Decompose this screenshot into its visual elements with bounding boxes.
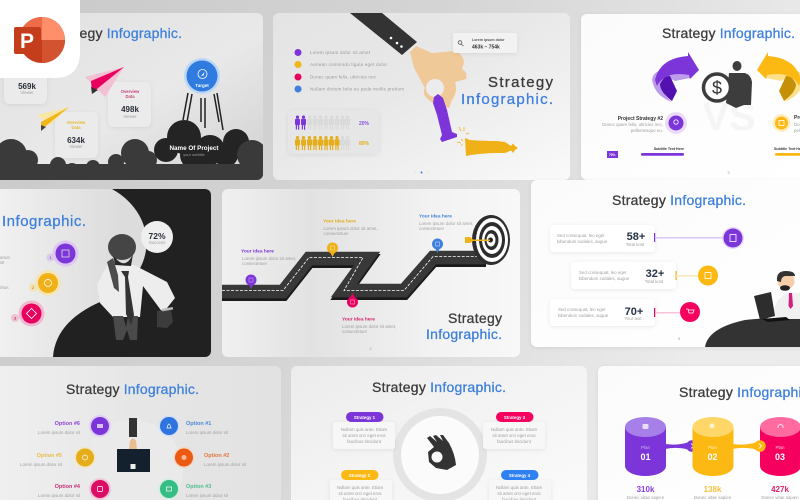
connectors: [665, 441, 760, 451]
callout: price range: 463k – 754k: [472, 44, 500, 50]
impact sparks: [457, 127, 469, 146]
callout: 72 percent: Success: [149, 240, 166, 245]
title: slide 6: Strategy Infographic.: [612, 192, 746, 208]
pin: blue: [432, 238, 443, 253]
cylinder: plan 02: Plan: [708, 445, 717, 450]
list: coloured bullets: Aenean commodo ligula eget dolor: [310, 62, 388, 67]
row: 70+: bibendum sodales, augue: [558, 313, 609, 318]
strategy 3: faucibus tincidunt: [497, 439, 532, 444]
row: 58+: 58+: [627, 231, 645, 243]
strategy 2: [330, 470, 392, 500]
strategy 2: sit amet orci eget eros: [338, 491, 382, 496]
progress: purple: [607, 147, 684, 158]
strategy 1: sit amet orci eget eros: [342, 433, 386, 438]
panel: total cost slide: [531, 180, 800, 347]
list: coloured bullets: Lorem ipsum dolor sit amet: [310, 50, 371, 55]
card: people pictogram: 80%: [359, 141, 370, 147]
row: 70+: 70+: [625, 306, 643, 318]
list: coloured bullets: Donec quam felis, ultricies nec: [310, 74, 377, 80]
text: project strategy 2: Donec quam felis, ultricies nec,: [602, 122, 663, 127]
chess piece: fallen yellow king: [465, 138, 518, 156]
option 6: [38, 415, 111, 437]
option 4: [38, 478, 111, 500]
title: slide 2: Infographic.: [461, 91, 553, 108]
card: 634k overview: Overview: [67, 120, 86, 125]
progress: purple: Subtitle Text Here: [654, 147, 684, 151]
title: slide 1: Strategy Infographic.: [49, 25, 182, 41]
card: 498k overview: [108, 82, 151, 127]
icon: yellow arrow: [757, 52, 800, 102]
row: 70+: [550, 299, 700, 326]
list: coloured bullets: Nullam dictum felis eu pede mollis pretium: [310, 86, 404, 92]
dark curved background: [53, 189, 211, 357]
strategy 3: Strategy 3: [504, 415, 526, 420]
badge: PowerPoint logo: [0, 0, 80, 78]
icon: purple arrow: [652, 52, 699, 102]
text: project strategy 2: pellentesque eu.: [631, 128, 663, 133]
option 4: Option #4: [55, 484, 81, 490]
cylinder: plan 03: [760, 417, 800, 476]
text: name of project: Name Of Project: [170, 145, 219, 152]
option 1: Lorem ipsum dolor sit: [186, 430, 229, 435]
illustration: man at desk: [705, 271, 800, 347]
label: idea pink: [342, 316, 396, 334]
option 5: Option #5: [37, 453, 62, 459]
faint ring: [83, 420, 183, 500]
option 2: Option #2: [204, 453, 229, 459]
card: 634k overview: [55, 112, 98, 158]
progress: yellow: [774, 147, 800, 156]
illustration: businessman on phone: [97, 234, 175, 340]
pin: purple: [246, 274, 256, 289]
callout: price range: [453, 33, 517, 53]
chess piece: purple bishop: [433, 94, 457, 142]
option 3: [158, 478, 229, 500]
value: 138k: Donec vitae sapien: [694, 495, 732, 500]
label: idea blue: [419, 214, 473, 231]
option 5: [20, 447, 96, 468]
value: 310k: Donec vitae sapien: [627, 495, 665, 500]
cylinder: plan 03: 03: [775, 452, 785, 462]
callout: 72 percent: [141, 221, 173, 253]
panel: six options slide: [0, 366, 281, 500]
step 1: 1: [49, 255, 52, 260]
strategy 1: [333, 412, 395, 449]
pin: pink: [347, 293, 358, 308]
icon: yellow circle: [772, 114, 790, 132]
clock ring: [393, 408, 487, 500]
cylinder: plan 01: Plan: [641, 445, 650, 450]
label: idea yellow: Your idea here: [323, 218, 356, 224]
value: 427k: 427k: [771, 485, 789, 494]
step 3: 3: [14, 316, 17, 320]
label: idea pink: consectetuer: [342, 329, 368, 334]
icon: purple circle: [665, 112, 687, 134]
card: 498k overview: Viewer: [123, 114, 137, 119]
title: slide 4: Infographic.: [2, 213, 86, 230]
strategy 4: Strategy 4: [509, 473, 531, 478]
title: slide 5: Strategy: [448, 310, 502, 326]
card: 569k viewer: 569k: [18, 82, 36, 91]
option 6: Option #6: [55, 421, 80, 427]
target circle: [184, 58, 220, 94]
card: 569k viewer: Viewer: [20, 90, 34, 95]
pin: yellow: [327, 242, 338, 257]
card: 498k overview: Data: [125, 94, 135, 99]
target and dart: [465, 215, 510, 265]
row: 32+: Sed consequat, leo eget: [579, 270, 627, 275]
value: 138k: [694, 485, 732, 500]
value: 427k: [761, 485, 799, 500]
label: idea yellow: [323, 218, 378, 236]
title: slide 5: Infographic.: [426, 326, 502, 342]
pagination: slide 6: 9: [678, 336, 681, 341]
pagination dots: [414, 172, 429, 174]
cylinder: plan 02: [692, 417, 734, 476]
text: name of project: your subtitle: [183, 152, 206, 157]
card: 634k overview: Data: [71, 125, 81, 130]
value: 427k: Donec vitae sapien: [761, 495, 799, 500]
small step text: rhus: [0, 285, 9, 290]
label: idea blue: Your idea here: [419, 214, 452, 220]
cylinder: plan 02: 02: [707, 452, 718, 462]
icon: businessman with dollar: [704, 61, 752, 108]
target circle: Target: [195, 83, 209, 88]
icon: pink paper plane: [85, 67, 124, 97]
title: slide 2: [461, 74, 554, 108]
row: 70+: Sed consequat, leo eget: [558, 307, 606, 312]
label: idea blue: Lorem ipsum dolor sit amet,: [419, 221, 473, 226]
row: 32+: [571, 262, 718, 289]
icon: ok hand: [427, 435, 456, 470]
step 2: 2: [32, 285, 35, 290]
row: 58+: [550, 225, 744, 252]
strategy 4: [489, 470, 551, 500]
card: people pictogram: 20%: [359, 121, 370, 127]
strategy 4: sit amet orci eget eros: [497, 491, 541, 496]
label: idea pink: Lorem ipsum dolor sit amet,: [342, 324, 396, 329]
callout: price range: Lorem ipsum dolor: [472, 38, 505, 42]
icon: businessman with dollar: $: [712, 78, 722, 98]
illustration: hand and briefcase: [117, 418, 150, 472]
strategy 3: sit amet orci eget eros: [492, 433, 536, 438]
panel: versus slide: [581, 14, 800, 180]
road: [222, 256, 486, 294]
strategy 1: faucibus tincidunt: [347, 439, 382, 444]
cylinder: plan 01: [625, 417, 666, 476]
small step text: amet: [0, 255, 11, 260]
strategy 2: Strategy 2: [349, 473, 371, 478]
option 3: Lorem ipsum dolor sit: [186, 493, 229, 498]
card: 569k viewer: [4, 68, 47, 104]
card: 634k overview: Viewer: [69, 144, 83, 149]
title: slide 3: Strategy Infographic.: [662, 25, 795, 41]
label: idea purple: [241, 248, 296, 266]
text: name of project: [170, 145, 219, 157]
label: idea yellow: Lorem ipsum dolor sit amet,: [324, 226, 378, 231]
pagination: slide 3: 3: [727, 170, 730, 175]
panel: four strategies slide: [291, 366, 587, 500]
value: 310k: 310k: [637, 485, 655, 494]
row: 58+: bibendum sodales, augue: [557, 239, 608, 244]
text: project strategy right: [794, 115, 800, 133]
callout: 72 percent: 72%: [148, 231, 166, 241]
smoke trails: [183, 93, 223, 130]
row: 32+: bibendum sodales, augue: [579, 276, 630, 281]
connector node purple: [686, 440, 698, 452]
label: idea purple: consectetuer: [242, 261, 268, 266]
row: 32+: Total kost: [645, 279, 664, 284]
text: project strategy 2: [602, 116, 663, 133]
progress: purple: 70%: [609, 153, 616, 157]
strategy 3: [483, 412, 545, 449]
row: 58+: Sed consequat, leo eget: [557, 233, 605, 238]
big faint VS: VS: [702, 95, 756, 139]
option 2: Lorem ipsum dolor sit: [204, 462, 247, 467]
strategy 1: Nullam quis ante. Etiam: [341, 427, 388, 432]
step 2: [29, 270, 61, 296]
label: idea purple: Your idea here: [241, 248, 274, 254]
card: people pictogram: [288, 110, 379, 154]
row: 58+: Total kost: [626, 242, 645, 247]
small step text: [0, 255, 11, 290]
text: project strategy 2: Project Strategy #2: [618, 116, 663, 122]
option 2: [174, 447, 247, 468]
connector node yellow: [754, 440, 766, 452]
option 1: Option #1: [186, 421, 211, 427]
card: 634k overview: 634k: [67, 136, 85, 145]
illustration: hand with sleeve: [350, 13, 466, 108]
panel: chess hand slide: [273, 13, 570, 180]
row: 32+: 32+: [646, 268, 664, 280]
option 1: [158, 416, 229, 436]
step 3: [11, 300, 44, 326]
label: idea yellow: consectetuer: [324, 231, 349, 236]
option 4: Lorem ipsum dolor sit: [38, 493, 81, 498]
title: slide 7: Strategy Infographic.: [66, 381, 199, 397]
title: slide 2: Strategy: [488, 74, 554, 91]
icon: yellow paper plane: [37, 107, 69, 131]
list: coloured bullets: [294, 49, 404, 92]
option 6: Lorem ipsum dolor sit: [38, 430, 81, 435]
label: idea pink: Your idea here: [342, 316, 375, 322]
strategy 2: Nullam quis ante. Etiam: [337, 485, 384, 490]
title: slide 5: [426, 310, 502, 342]
cylinder: plan 03: Plan: [775, 445, 785, 450]
card: 498k overview: Overview: [121, 89, 140, 94]
card: 498k overview: 498k: [121, 105, 139, 114]
icon: letter P tile: P: [20, 30, 34, 53]
row: 70+: Your text: [624, 316, 642, 321]
value: 310k: [627, 485, 665, 500]
panel: cylinders plan slide: [598, 366, 800, 500]
label: idea purple: Lorem ipsum dolor sit amet,: [242, 256, 296, 261]
step 1: [46, 240, 78, 266]
title: slide 8: Strategy Infographic.: [372, 379, 506, 395]
small step text: sit: [0, 260, 5, 265]
icon: PowerPoint disc: [19, 17, 65, 63]
pagination: slide 5: 2: [369, 346, 372, 351]
panel: road map slide: [222, 189, 520, 357]
clouds: [0, 120, 272, 181]
option 3: Option #3: [186, 484, 211, 490]
option 5: Lorem ipsum dolor sit: [20, 462, 63, 467]
strategy 1: Strategy 1: [354, 415, 376, 420]
strategy 4: Nullam quis ante. Etiam: [496, 485, 543, 490]
strategy 3: Nullam quis ante. Etiam: [491, 427, 538, 432]
cylinder: plan 01: 01: [640, 452, 651, 462]
panel: project clouds slide: [0, 13, 272, 181]
value: 138k: 138k: [704, 485, 722, 494]
panel: businessman phone slide: [0, 189, 211, 357]
label: idea blue: consectetuer: [419, 226, 445, 231]
